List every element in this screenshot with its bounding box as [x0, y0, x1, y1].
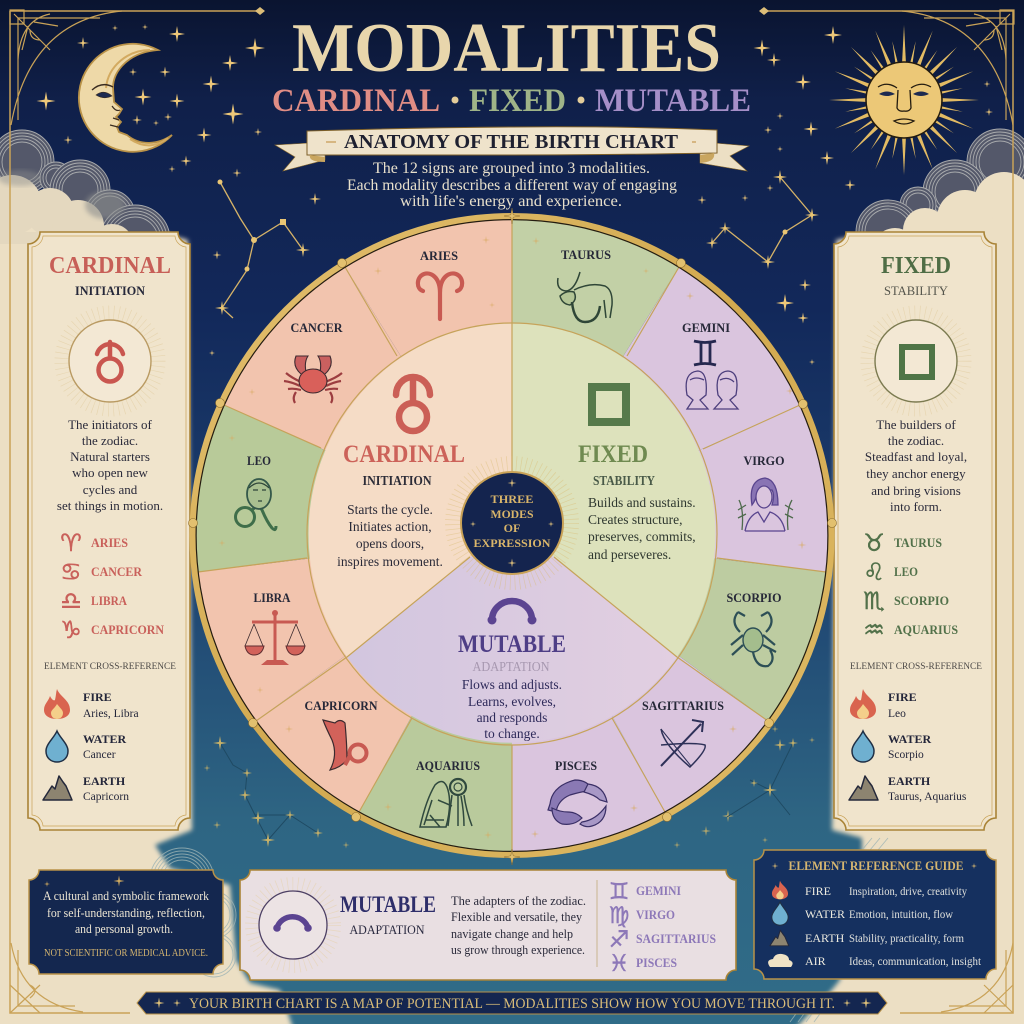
cardinal inner text: INITIATION	[362, 473, 432, 488]
cardinal sign list: CAPRICORN	[91, 622, 165, 637]
cardinal inner text: CARDINAL	[343, 441, 465, 468]
cardinal sign list: ♈︎	[60, 529, 82, 557]
subtitle: CARDINAL	[272, 83, 440, 119]
guide rows: Inspiration, drive, creativity	[849, 884, 967, 898]
mutable sign list	[609, 879, 716, 977]
fixed inner text: Builds and sustains.	[588, 495, 696, 510]
description	[451, 894, 586, 957]
sign labels: LIBRA	[254, 590, 291, 605]
panel: disclaimer	[29, 870, 223, 974]
cardinal inner text: inspires movement.	[337, 554, 443, 569]
description: into form.	[890, 499, 942, 514]
center medallion	[453, 464, 571, 582]
sign labels: CAPRICORN	[304, 698, 378, 713]
title: MODALITIES	[292, 10, 721, 87]
cardinal inner text: Initiates action,	[348, 519, 432, 534]
guide rows: EARTH	[805, 931, 845, 945]
sign labels	[247, 247, 784, 773]
fixed inner text: FIXED	[578, 441, 648, 468]
description: The initiators of	[68, 417, 153, 432]
description: navigate change and help	[451, 927, 573, 941]
description: Steadfast and loyal,	[865, 449, 967, 464]
guide rows: Stability, practicality, form	[849, 931, 965, 945]
element list: WATER	[83, 732, 126, 746]
fixed sign list: SCORPIO	[894, 593, 949, 608]
cardinal sign list: LIBRA	[91, 593, 128, 608]
element list	[43, 689, 139, 803]
heading: fixed: FIXED	[881, 253, 951, 279]
intro text: Each modality describes a different way of engaging	[347, 177, 677, 194]
element list: Leo	[888, 708, 906, 720]
panel: disclaimer: for self-understanding, reflection,	[47, 905, 205, 920]
cardinal sign list: CANCER	[91, 564, 143, 579]
icon: sun with face	[829, 25, 979, 175]
sign labels: CANCER	[290, 320, 343, 335]
cardinal sign list: ♑︎	[60, 616, 82, 644]
sign labels: SAGITTARIUS	[642, 698, 724, 713]
cardinal sign list	[60, 529, 165, 644]
description: the zodiac.	[82, 433, 138, 448]
element cross-reference label: ELEMENT CROSS-REFERENCE	[850, 662, 982, 672]
mutable sign list: ♍︎	[609, 903, 629, 929]
guide rows: AIR	[805, 954, 826, 968]
icon: cardinal symbol medallion	[62, 313, 158, 409]
fixed sign list: ♉︎	[863, 529, 885, 557]
panel: cardinal	[28, 232, 190, 830]
icon: cardinal symbol	[396, 377, 430, 431]
fixed inner text: STABILITY	[593, 473, 655, 488]
sign labels: TAURUS	[561, 247, 611, 262]
cardinal sign list: ARIES	[91, 535, 128, 550]
sign labels: SCORPIO	[726, 590, 782, 605]
panel: disclaimer: NOT SCIENTIFIC OR MEDICAL ADVICE.	[44, 948, 208, 959]
element list: FIRE	[83, 690, 112, 704]
element list: FIRE	[888, 690, 917, 704]
subtitle: FIXED	[469, 83, 566, 119]
mutable inner text: MUTABLE	[458, 631, 566, 658]
panel: disclaimer: A cultural and symbolic framework	[43, 888, 209, 903]
subheading: initiation: INITIATION	[75, 283, 146, 298]
zodiac wheel	[188, 208, 836, 865]
stars	[36, 24, 993, 365]
sign labels: ARIES	[420, 248, 458, 263]
description: us grow through experience.	[451, 943, 585, 957]
wheel spokes	[198, 220, 826, 852]
subheading: adaptation: ADAPTATION	[350, 922, 425, 937]
subtitle	[272, 83, 751, 119]
constellation: lower right	[727, 738, 798, 817]
icon: capricorn	[323, 720, 366, 770]
description: The builders of	[876, 417, 956, 432]
cardinal sign list: ♋︎	[60, 558, 82, 586]
sign labels: LEO	[247, 453, 271, 468]
cardinal inner text	[337, 377, 465, 569]
fixed sign list	[863, 529, 958, 644]
mutable inner text: ADAPTATION	[472, 659, 550, 674]
icon: pisces fish	[548, 780, 607, 827]
icon: fixed symbol	[592, 387, 626, 422]
panel: fixed	[834, 232, 996, 830]
heading: cardinal: CARDINAL	[49, 253, 171, 279]
icon: fixed symbol medallion	[868, 313, 964, 409]
icon: mutable symbol	[488, 601, 536, 624]
subtitle: MUTABLE	[595, 83, 751, 119]
constellation: upper left	[215, 180, 310, 318]
fixed sign list: ♌︎	[863, 558, 885, 586]
guide heading: ELEMENT REFERENCE GUIDE	[788, 859, 964, 873]
guide rows: Ideas, communication, insight	[849, 954, 982, 968]
wheel inner sectors	[309, 323, 715, 743]
faint lower stars	[204, 726, 815, 848]
icon: cancer crab	[284, 356, 342, 403]
intro text: The 12 signs are grouped into 3 modalities.	[373, 160, 650, 177]
icon: crescent moon with face	[79, 44, 172, 152]
icon: taurus bull	[558, 272, 612, 322]
center medallion: OF	[504, 521, 520, 535]
center medallion: EXPRESSION	[474, 536, 551, 550]
description: who open new	[72, 465, 149, 480]
description: and bring visions	[871, 483, 961, 498]
mutable sign list: GEMINI	[636, 883, 681, 898]
center medallion: MODES	[490, 507, 534, 521]
icon: virgo figure	[738, 478, 793, 531]
panel: disclaimer: and personal growth.	[75, 921, 173, 936]
wheel faint sparkles	[218, 236, 806, 839]
guide rows: FIRE	[805, 884, 831, 898]
fixed sign list: LEO	[894, 564, 918, 579]
mutable sign list: ♊︎	[609, 879, 629, 905]
constellation: lower left	[213, 736, 323, 847]
guide rows	[768, 881, 982, 968]
cardinal sign list: ♎︎	[60, 587, 82, 615]
mutable inner text: to change.	[484, 726, 540, 741]
clouds: top left	[0, 130, 170, 275]
bottom ribbon: YOUR BIRTH CHART IS A MAP OF POTENTIAL — MODALITIES SHOW HOW YOU MOVE THROUGH IT.	[189, 996, 835, 1012]
ribbon banner	[275, 127, 749, 171]
mutable sign list: SAGITTARIUS	[636, 931, 716, 946]
element list: EARTH	[83, 774, 126, 788]
panel: element reference guide	[754, 850, 996, 979]
element list: EARTH	[888, 774, 931, 788]
sign labels: PISCES	[555, 758, 597, 773]
fixed sign list: ♏︎	[863, 587, 885, 615]
description: The adapters of the zodiac.	[451, 894, 586, 908]
icon: aquarius figure	[420, 779, 472, 827]
ribbon banner: ANATOMY OF THE BIRTH CHART	[344, 131, 679, 153]
guide rows: WATER	[805, 907, 845, 921]
subheading: stability: STABILITY	[884, 283, 949, 298]
mutable sign list: ♓︎	[609, 951, 629, 977]
fixed sign list: TAURUS	[894, 535, 942, 550]
description: they anchor energy	[866, 466, 966, 481]
heading: mutable: MUTABLE	[340, 892, 436, 917]
element list: Scorpio	[888, 749, 924, 761]
description: set things in motion.	[57, 498, 163, 513]
element list: Taurus, Aquarius	[888, 791, 967, 803]
mutable sign list: PISCES	[636, 955, 677, 970]
constellation: upper right	[706, 170, 819, 269]
icon: mutable medallion	[252, 884, 334, 966]
fixed inner text: and perseveres.	[588, 547, 671, 562]
element list	[849, 689, 967, 803]
element list: WATER	[888, 732, 931, 746]
mutable sign list: VIRGO	[636, 907, 675, 922]
description: Natural starters	[70, 449, 150, 464]
mutable inner text	[458, 601, 566, 741]
mutable inner text: and responds	[477, 710, 547, 725]
element cross-reference label: ELEMENT CROSS-REFERENCE	[44, 662, 176, 672]
fixed inner text: preserves, commits,	[588, 529, 696, 544]
sign labels: AQUARIUS	[416, 758, 480, 773]
icon: gemini glyph and twins	[686, 341, 738, 409]
cardinal inner text: opens doors,	[356, 536, 424, 551]
element list: Cancer	[83, 749, 116, 761]
fixed sign list: AQUARIUS	[894, 622, 958, 637]
element list: Capricorn	[83, 791, 129, 803]
icon: libra scales	[245, 610, 305, 665]
mutable inner text: Learns, evolves,	[468, 694, 556, 709]
bottom ribbon	[137, 992, 887, 1014]
fixed sign list: ♒︎	[863, 616, 885, 644]
description	[865, 417, 967, 514]
description: cycles and	[83, 482, 138, 497]
center medallion: THREE	[490, 492, 534, 506]
intro text	[347, 160, 677, 210]
icon: sagittarius bow	[661, 720, 705, 767]
guide rows: Emotion, intuition, flow	[849, 907, 953, 921]
clouds: bottom hatching	[150, 838, 888, 1022]
wheel outer sectors	[196, 219, 828, 852]
description	[57, 417, 163, 513]
fixed inner text	[578, 387, 696, 562]
icon: aries	[418, 274, 462, 319]
sign labels: GEMINI	[682, 320, 730, 335]
wheel gold ring	[188, 208, 836, 865]
intro text: with life's energy and experience.	[400, 193, 622, 210]
element list: Aries, Libra	[83, 708, 139, 720]
description: the zodiac.	[888, 433, 944, 448]
mutable sign list: ♐︎	[609, 927, 629, 953]
icon: leo	[236, 479, 276, 530]
panel: mutable	[240, 870, 736, 980]
fixed inner text: Creates structure,	[588, 512, 682, 527]
description: Flexible and versatile, they	[451, 910, 583, 924]
mutable inner text: Flows and adjusts.	[462, 677, 562, 692]
icon: scorpio	[731, 612, 776, 666]
clouds: top right	[856, 129, 1024, 272]
sign labels: VIRGO	[744, 453, 784, 468]
cardinal inner text: Starts the cycle.	[347, 502, 433, 517]
